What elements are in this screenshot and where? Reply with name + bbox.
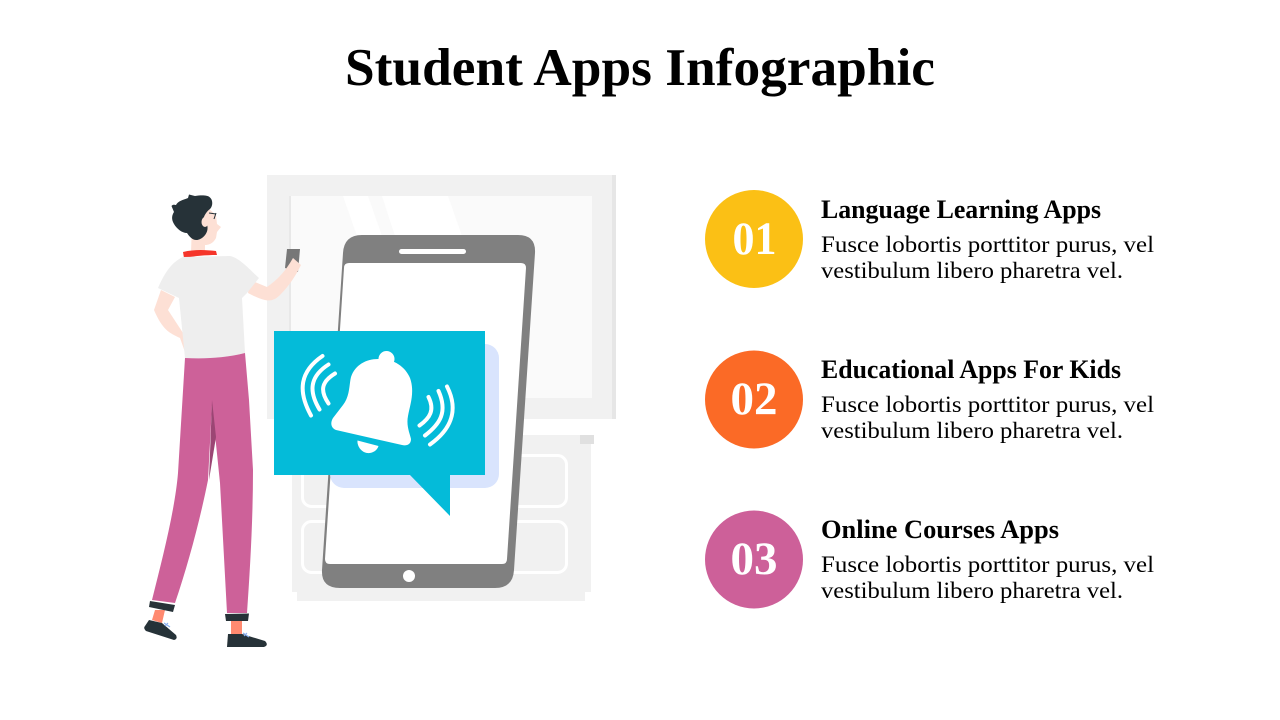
smartphone [322, 235, 535, 588]
title: Student Apps Infographic [345, 39, 935, 97]
window on wall [267, 175, 616, 419]
description 03 [821, 552, 1154, 604]
item 03 [705, 510, 1154, 608]
trousers [152, 353, 253, 613]
item 02 [705, 350, 1154, 448]
neck and face [191, 208, 221, 253]
number badge 02 [705, 350, 803, 448]
speech bubble [274, 331, 485, 516]
notification backing card [330, 344, 499, 488]
number badge 01 [705, 190, 803, 288]
person [144, 194, 301, 647]
heading 03: Online Courses Apps [821, 515, 1059, 544]
ear [202, 217, 208, 227]
number badge 01: 01 [732, 213, 776, 265]
number badge 02: 02 [730, 373, 778, 425]
hair [172, 194, 212, 240]
description 03: vestibulum libero pharetra vel. [821, 578, 1123, 604]
heading 02: Educational Apps For Kids [821, 355, 1121, 384]
cabinet [292, 435, 594, 601]
number badge 03 [705, 510, 803, 608]
illustration: student with phone notification [144, 175, 616, 647]
t-shirt [158, 256, 259, 358]
cuffs [149, 601, 249, 621]
arm holding phone [248, 249, 301, 300]
description 01: Fusce lobortis porttitor purus, vel [821, 232, 1154, 258]
trouser shadow [209, 400, 216, 480]
description 01 [821, 232, 1154, 284]
shoes [144, 620, 267, 647]
description 02 [821, 392, 1154, 444]
description 02: vestibulum libero pharetra vel. [821, 418, 1123, 444]
other arm [154, 290, 185, 352]
glasses hint [209, 213, 216, 219]
heading 01: Language Learning Apps [821, 195, 1101, 224]
description 02: Fusce lobortis porttitor purus, vel [821, 392, 1154, 418]
laces [164, 623, 249, 637]
item 01 [705, 190, 1154, 288]
description 03: Fusce lobortis porttitor purus, vel [821, 552, 1154, 578]
number badge 03: 03 [730, 533, 778, 585]
collar [183, 250, 217, 258]
icon: ringing bell [303, 351, 453, 453]
description 01: vestibulum libero pharetra vel. [821, 258, 1123, 284]
ankles [152, 610, 242, 635]
